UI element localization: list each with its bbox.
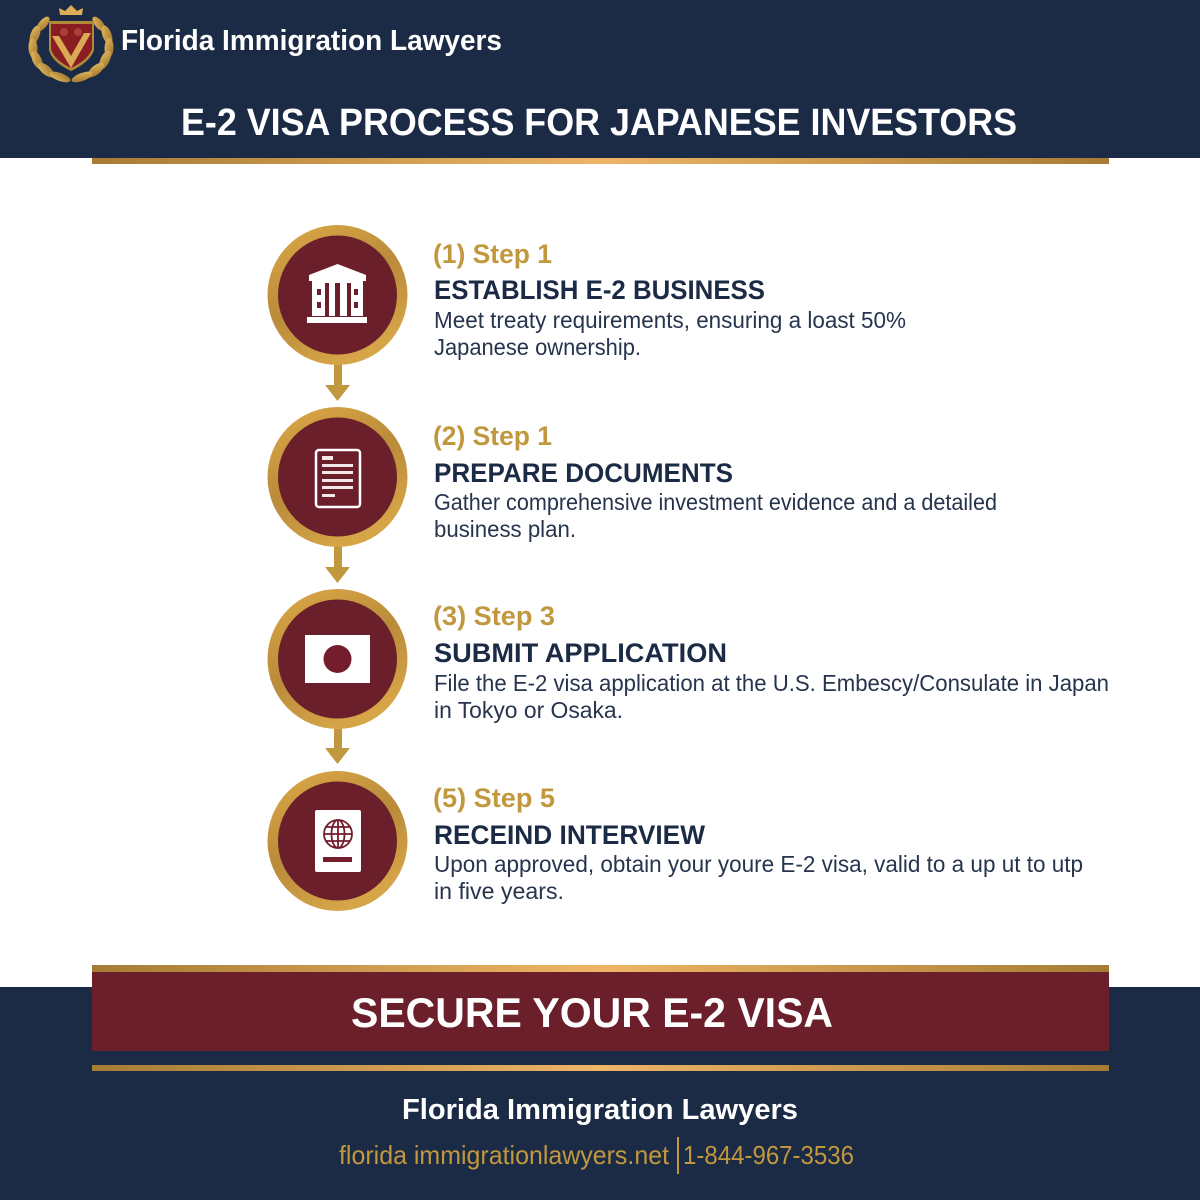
step 2 label: (2) Step 1 [433,421,552,451]
step 3 icon: Japanese flag [268,589,408,729]
logo wordmark: Florida Immigration Lawyers [121,25,502,57]
step 4 description: in five years. [434,878,564,904]
footer band [0,987,1200,1200]
step 4 label: (5) Step 5 [433,783,555,813]
step 1 description [434,307,906,360]
step 3 description: in Tokyo or Osaka. [434,697,623,723]
step 2 description: Gather comprehensive investment evidence and a detailed [434,489,997,515]
step 2 heading: PREPARE DOCUMENTS [434,458,733,488]
step 2 icon: document [268,407,408,547]
step 4 description: Upon approved, obtain your youre E-2 visa, valid to a up ut to utp [434,851,1083,877]
step 2 description: business plan. [434,516,576,542]
step 1 description: Japanese ownership. [434,334,641,360]
header band [0,0,1200,158]
step 3 description: File the E-2 visa application at the U.S. Embescy/Consulate in Japan [434,670,1109,696]
top gold rule [92,158,1109,164]
connector arrow 3 [325,727,350,764]
connector arrow 1 [325,364,350,401]
footer gold rule [92,1065,1109,1071]
title: E-2 VISA PROCESS FOR JAPANESE INVESTORS [181,102,1017,144]
step 1 icon: bank building [268,225,408,365]
call to action banner: SECURE YOUR E-2 VISA [351,989,833,1036]
step 2 description [434,489,997,542]
step 3 description [434,670,1109,723]
footer contact line [339,1137,854,1174]
step 3 heading: SUBMIT APPLICATION [434,638,727,668]
step 4 description [434,851,1083,904]
step 3 label: (3) Step 3 [433,601,555,631]
connector arrow 2 [325,546,350,583]
step 1 label: (1) Step 1 [433,239,552,269]
call to action banner [92,965,1109,1051]
step 1 description: Meet treaty requirements, ensuring a loast 50% [434,307,906,333]
step 4 icon: passport [268,771,408,911]
footer contact line: 1-844-967-3536 [683,1140,854,1170]
logo emblem [27,5,115,85]
footer contact line: florida immigrationlawyers.net [339,1140,670,1170]
step 1 heading: ESTABLISH E-2 BUSINESS [434,275,765,305]
footer firm name: Florida Immigration Lawyers [402,1094,798,1126]
step 4 heading: RECEIND INTERVIEW [434,820,706,850]
